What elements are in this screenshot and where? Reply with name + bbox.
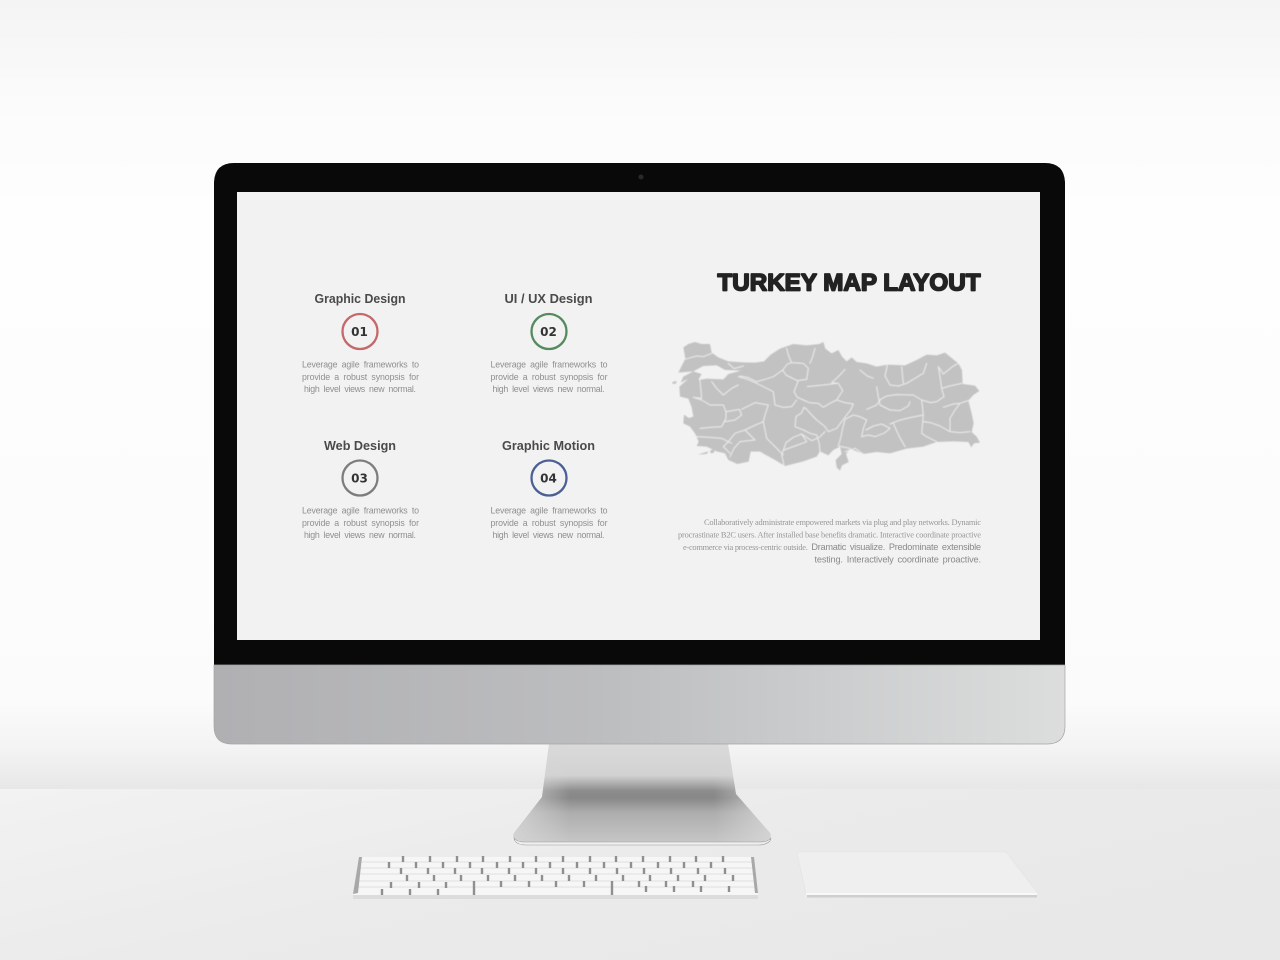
description bbox=[302, 506, 419, 540]
description bbox=[302, 360, 419, 394]
paragraph bbox=[678, 518, 981, 564]
number badge 03: 03 bbox=[351, 472, 368, 486]
description: high level views new normal. bbox=[492, 384, 604, 394]
description: Leverage agile frameworks to bbox=[302, 360, 419, 370]
card: Graphic Design bbox=[302, 291, 419, 394]
description: high level views new normal. bbox=[304, 530, 416, 540]
number badge 01: 01 bbox=[351, 325, 368, 339]
card: UI / UX Design bbox=[490, 291, 608, 394]
paragraph: Collaboratively administrate empowered markets via plug and play networks. Dynamic bbox=[704, 518, 981, 527]
paragraph: e-commerce via process-centric outside. Dramatic visualize. Predominate extensible bbox=[683, 542, 981, 552]
card: Web Design bbox=[302, 438, 419, 540]
description: Leverage agile frameworks to bbox=[490, 360, 608, 370]
monitor chin bbox=[214, 665, 1065, 744]
monitor bezel bbox=[214, 163, 1065, 665]
monitor stand bbox=[513, 744, 771, 845]
heading: Graphic Design bbox=[314, 291, 406, 306]
description: provide a robust synopsis for bbox=[490, 518, 608, 528]
trackpad bbox=[797, 852, 1037, 898]
map of Turkey bbox=[672, 342, 980, 471]
description: high level views new normal. bbox=[492, 530, 604, 540]
number badge 02: 02 bbox=[540, 325, 557, 339]
description: provide a robust synopsis for bbox=[302, 372, 419, 382]
description bbox=[490, 506, 608, 540]
paragraph: procrastinate B2C users. After installed base benefits dramatic. Interactive coordinate proactive bbox=[678, 530, 981, 540]
number badge 04: 04 bbox=[540, 472, 557, 486]
heading: Web Design bbox=[324, 438, 396, 453]
title: TURKEY MAP LAYOUT bbox=[718, 269, 981, 296]
description: Leverage agile frameworks to bbox=[302, 506, 419, 516]
heading: Graphic Motion bbox=[502, 438, 595, 453]
background: desk surface bbox=[0, 789, 1280, 960]
description: high level views new normal. bbox=[304, 384, 416, 394]
description bbox=[490, 360, 608, 394]
keyboard bbox=[353, 856, 758, 899]
paragraph: testing. Interactively coordinate proactive. bbox=[814, 554, 981, 564]
heading: UI / UX Design bbox=[504, 291, 593, 306]
key gaps bbox=[382, 856, 733, 895]
description: provide a robust synopsis for bbox=[490, 372, 608, 382]
card: Graphic Motion bbox=[490, 438, 608, 540]
screen bbox=[237, 192, 1040, 640]
description: Leverage agile frameworks to bbox=[490, 506, 608, 516]
description: provide a robust synopsis for bbox=[302, 518, 419, 528]
webcam bbox=[638, 174, 644, 180]
monitor bbox=[214, 163, 1065, 744]
